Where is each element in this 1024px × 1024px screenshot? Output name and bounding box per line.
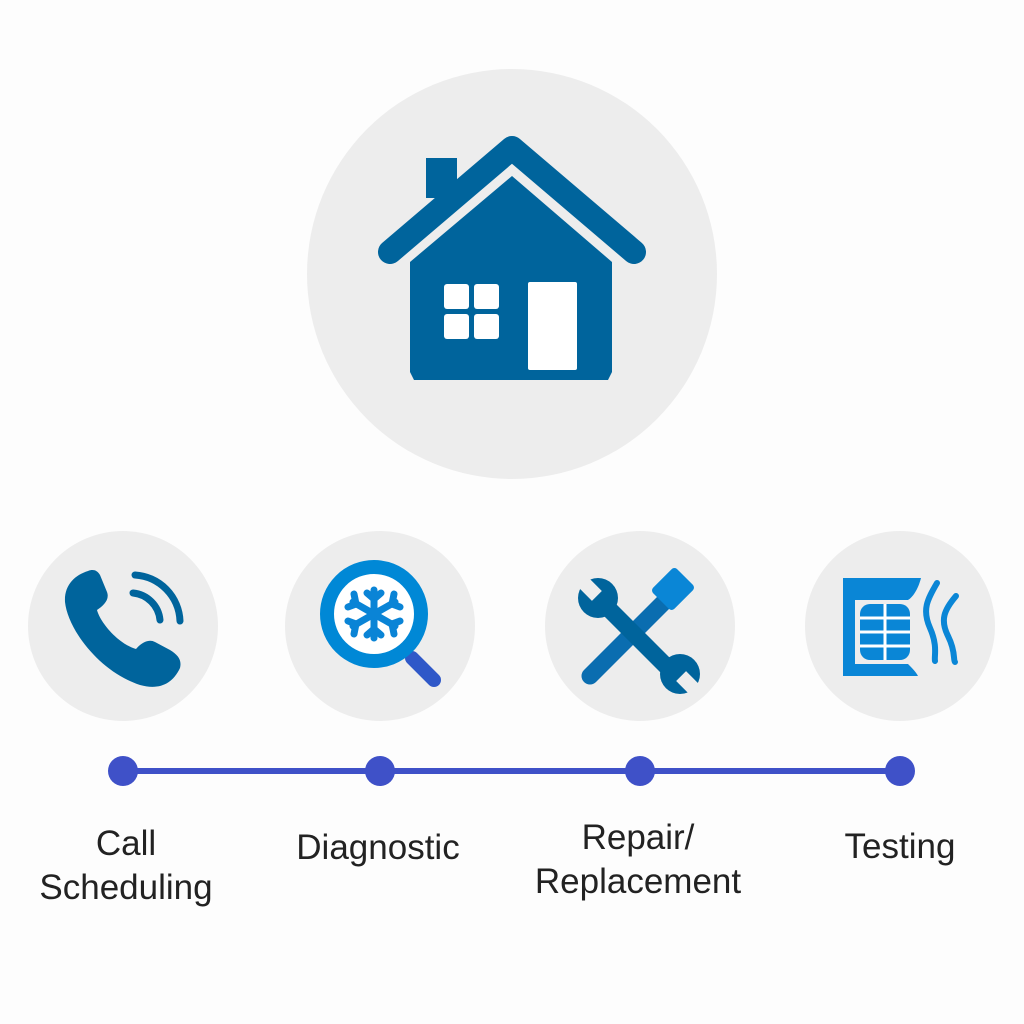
step 3 circle: tools <box>545 531 735 721</box>
icon: house <box>390 148 634 380</box>
label: Repair/Replacement <box>535 818 741 901</box>
timeline <box>108 756 915 786</box>
hero circle with house <box>307 69 717 479</box>
label: Call Scheduling: Scheduling <box>39 868 213 907</box>
step 2 circle: magnifier snowflake <box>285 531 475 721</box>
label: Diagnostic: Diagnostic <box>296 828 460 867</box>
label: Repair/Replacement: Replacement <box>535 862 741 901</box>
step 4 circle: filter <box>805 531 995 721</box>
label: Testing: Testing <box>845 827 955 866</box>
label: Call Scheduling <box>39 824 213 907</box>
label: Call Scheduling: Call <box>96 824 156 863</box>
label: Repair/Replacement: Repair/ <box>582 818 694 857</box>
step 1 circle: phone <box>28 531 218 721</box>
